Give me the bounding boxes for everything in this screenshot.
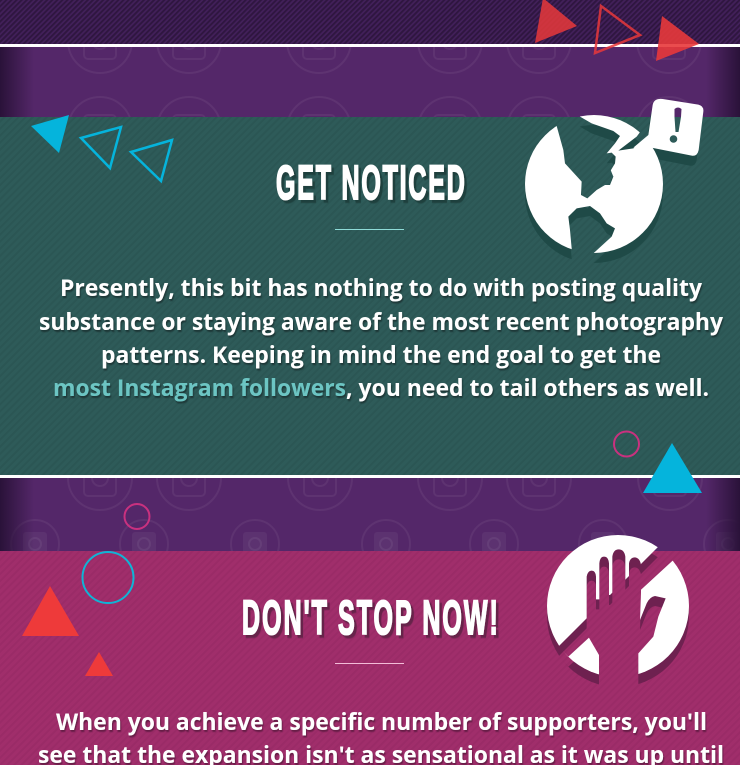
decoration: red triangles top right <box>535 0 699 61</box>
heading rule <box>335 663 404 664</box>
exclamation mark <box>670 108 682 143</box>
body text: get noticed: substance or staying aware of the most recent photography <box>39 305 724 337</box>
purple band: lower with Instagram pattern <box>0 446 740 568</box>
body text: get noticed: patterns. Keeping in mind the end goal to get the <box>101 338 661 370</box>
icon: stop hand in prohibition circle <box>547 535 689 687</box>
heading rule <box>335 229 404 230</box>
top dark striped strip <box>0 0 740 44</box>
decoration: blue triangles top left <box>31 115 172 181</box>
body text: get noticed <box>39 271 724 403</box>
decoration: pink circle and blue triangle <box>614 432 702 493</box>
decoration: circles and red triangles left <box>22 504 150 676</box>
body text: get noticed: , you need to tail others as well. <box>346 371 709 403</box>
panel: don't stop now <box>0 551 740 765</box>
heading: don't stop now: DON'T STOP NOW! <box>242 591 498 645</box>
white divider top <box>0 44 740 47</box>
body text: don't stop now: When you achieve a specific number of supporters, you'll <box>56 705 707 737</box>
icon: globe with alert speech bubble <box>525 99 703 263</box>
body text: get noticed: Presently, this bit has nothing to do with posting quality <box>60 271 703 303</box>
heading: get noticed: GET NOTICED <box>276 156 465 210</box>
body text: get noticed: most Instagram followers <box>53 371 346 403</box>
panel: get noticed <box>0 117 740 475</box>
purple band: upper with Instagram pattern <box>0 9 740 161</box>
white divider middle <box>0 475 740 478</box>
body text: don't stop now <box>38 705 724 765</box>
